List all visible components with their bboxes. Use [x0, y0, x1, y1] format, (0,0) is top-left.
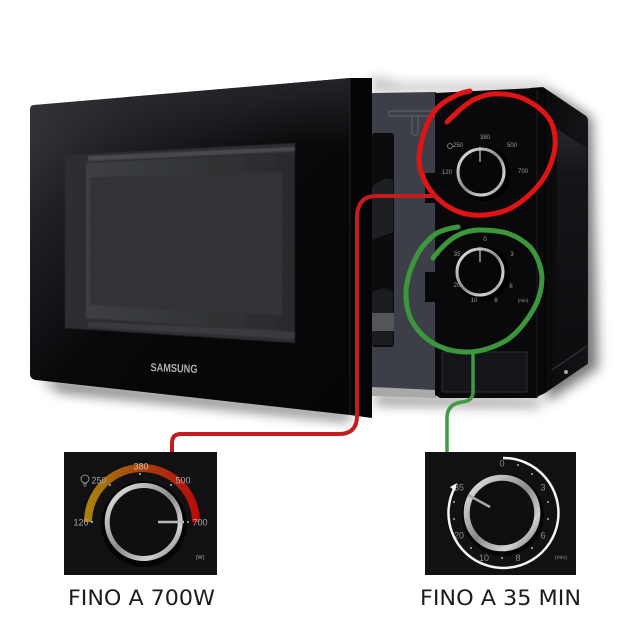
scale ticks: [453, 464, 549, 559]
timer scale labels: 35: [454, 482, 464, 492]
timer dial: 20: [454, 283, 461, 289]
timer knob: [462, 474, 544, 556]
power scale labels: [73, 462, 208, 561]
green timer highlight circle: [406, 227, 542, 352]
power scale labels: 250: [91, 476, 107, 486]
power scale labels: 500: [175, 476, 191, 486]
caption: power: FINO A 700W: [68, 586, 215, 611]
timer scale labels: 0: [499, 458, 505, 468]
timer dial: 10: [471, 298, 478, 304]
microwave drop shadows: [40, 76, 598, 421]
power dial: 380: [480, 135, 491, 141]
caption: timer: FINO A 35 MIN: [420, 586, 581, 611]
power scale labels: (W): [196, 555, 205, 561]
power dial: [442, 135, 529, 201]
door window: [65, 143, 295, 343]
timer dial: [454, 237, 529, 304]
power dial: 700: [518, 169, 529, 175]
timer scale labels: 8: [515, 553, 521, 563]
oven interior: [372, 92, 436, 398]
red power highlight circle: [419, 91, 555, 215]
timer dial: 8: [494, 298, 498, 304]
power scale labels: 700: [192, 518, 208, 528]
timer scale labels: [454, 458, 567, 563]
power dial: 120: [442, 170, 453, 176]
timer dial: 35: [454, 252, 461, 258]
icon: light bulb: [81, 475, 89, 486]
panel: timer dial detail: [425, 452, 576, 575]
timer dial: 3: [510, 252, 514, 258]
green connector line: [447, 353, 473, 452]
door: [30, 78, 372, 418]
timer dial: 6: [509, 284, 513, 290]
door release button: [442, 352, 527, 392]
scale ticks: [91, 473, 189, 523]
timer dial: 0: [483, 237, 487, 243]
timer dial: (min): [518, 298, 529, 303]
panel: power dial detail: [64, 452, 217, 575]
power knob: [101, 481, 187, 567]
microwave right side: [530, 87, 588, 398]
power dial: 250: [453, 143, 464, 149]
timer scale labels: 6: [540, 530, 546, 540]
power dial: 500: [507, 143, 518, 149]
power arc gauge: [88, 468, 196, 522]
timer scale labels: 10: [479, 553, 489, 563]
power scale labels: 120: [73, 518, 89, 528]
red connector line: [172, 196, 437, 452]
timer scale labels: (min): [555, 555, 567, 561]
power scale labels: 380: [133, 462, 149, 472]
timer sweep arrow: [448, 458, 558, 568]
brand logo: SAMSUNG: [150, 362, 198, 376]
timer scale labels: 3: [540, 482, 546, 492]
microwave: [30, 78, 588, 418]
control panel: [435, 88, 537, 398]
timer scale labels: 20: [454, 530, 464, 540]
